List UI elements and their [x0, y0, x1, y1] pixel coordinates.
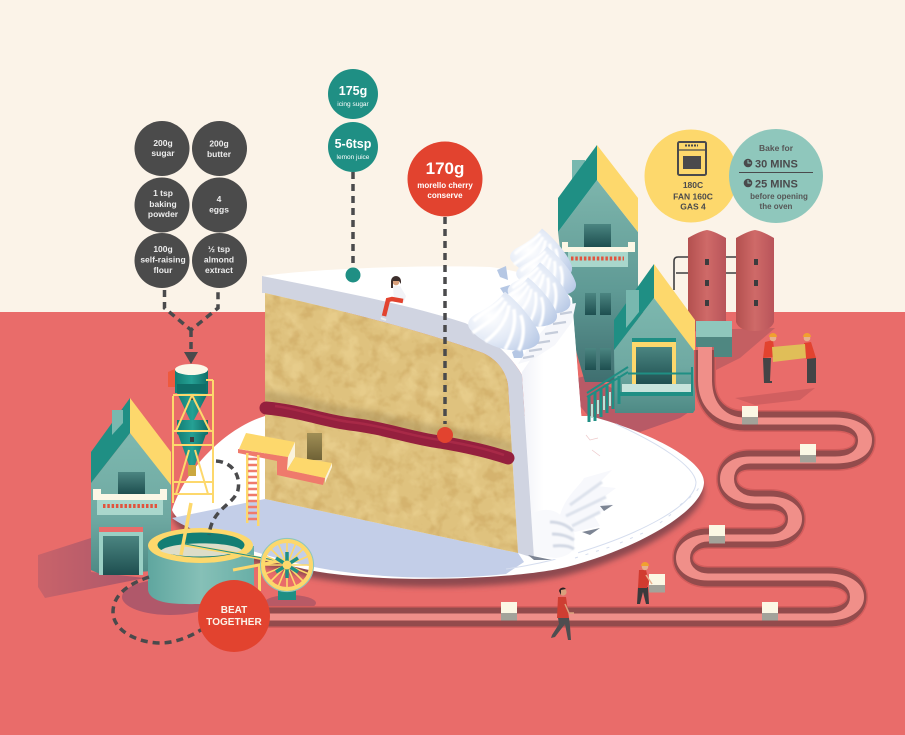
icon group: silos [674, 230, 774, 333]
left house [91, 398, 171, 575]
silo right [736, 230, 774, 331]
chimney [626, 290, 639, 328]
balcony [93, 489, 167, 515]
200g butter: 200g [209, 138, 229, 148]
cake top and side icing [262, 266, 584, 560]
175g icing sugar [328, 69, 378, 119]
beat together badge: BEAT [221, 605, 247, 616]
orange tab [168, 369, 175, 387]
arrow into tower [184, 330, 198, 364]
200g sugar: sugar [151, 148, 175, 158]
plate shaded surface [172, 499, 524, 578]
back icing blob [560, 470, 616, 535]
shadow: silos [695, 328, 775, 372]
temperature text [673, 180, 713, 212]
body [91, 433, 171, 574]
5-6tsp lemon juice: lemon juice [337, 154, 370, 161]
shadow: wheel [264, 595, 316, 611]
bake time badge [729, 129, 823, 223]
belt rim [262, 350, 865, 617]
mixer tower [168, 364, 213, 503]
silo left [688, 230, 726, 333]
box 2 [800, 444, 816, 462]
dashed flow: bowl to beat together [113, 577, 204, 643]
1 tsp baking powder: 1 tsp [153, 188, 173, 198]
attic window [584, 224, 611, 247]
roof right [130, 398, 171, 485]
100g self-raising flour: 100g [153, 244, 173, 254]
conveyor belt [262, 347, 865, 617]
workers carrying box [763, 333, 816, 383]
duct box [696, 321, 732, 357]
stair highlights [592, 392, 610, 418]
box 3 [709, 525, 725, 544]
roof left [558, 145, 597, 232]
roof left [91, 398, 130, 483]
bowl body [148, 546, 254, 604]
meringue third [508, 262, 570, 314]
door [99, 527, 143, 575]
dashed line: conserve to jam [443, 217, 447, 424]
temperature text: GAS 4 [680, 202, 706, 212]
bake time badge: 25 MINS [755, 178, 798, 190]
side icing shade [522, 300, 584, 556]
meringue second [497, 277, 557, 327]
dot: icing on cake [346, 268, 360, 282]
framed window [632, 338, 676, 385]
ingredients: dry cluster [134, 121, 247, 288]
175g icing sugar: icing sugar [337, 101, 370, 108]
box 6 [649, 574, 665, 592]
200g butter: butter [207, 149, 232, 159]
sponge texture [260, 285, 525, 560]
chimney [112, 410, 123, 435]
half tsp almond extract: extract [205, 265, 233, 275]
oven temperature badge [644, 130, 738, 222]
1 tsp baking powder [134, 178, 190, 232]
cylinder middle [177, 420, 208, 442]
small house [587, 264, 695, 422]
roof right [597, 145, 638, 232]
plate rim marks [506, 424, 700, 569]
temperature text: FAN 160C [673, 192, 713, 202]
sponge [265, 293, 518, 553]
chimney [572, 160, 585, 183]
carried box [772, 344, 806, 362]
roof right [654, 264, 695, 352]
porch rail [587, 367, 692, 397]
belt surface [262, 347, 865, 617]
5-6tsp lemon juice: 5-6tsp [335, 137, 372, 151]
walking person [551, 588, 574, 640]
4 eggs: eggs [209, 204, 229, 214]
front icing edge [262, 276, 534, 558]
100g self-raising flour: self-raising [140, 254, 186, 264]
worker left [763, 333, 777, 383]
platform underside [238, 449, 325, 485]
bowl post [258, 565, 261, 591]
5-6tsp lemon juice [328, 122, 378, 172]
half tsp almond extract [192, 233, 247, 288]
platform end [325, 463, 332, 483]
silo top [175, 364, 208, 375]
dashed flow: tower to mixing bowl [209, 461, 239, 535]
conserve badge: 170g [426, 159, 464, 178]
icon: oven [678, 142, 706, 175]
cone upper [177, 393, 208, 420]
meringue fourth [516, 246, 576, 296]
tall house [558, 145, 638, 382]
front icing blob [528, 510, 574, 560]
lower platform [287, 457, 332, 478]
connectors [190, 395, 194, 442]
batter [160, 543, 242, 557]
stairs platform on cake [238, 433, 332, 526]
porch beam [620, 392, 693, 396]
dashed line: icing to cake [351, 172, 355, 268]
box 5 [501, 602, 517, 620]
icing badges [328, 69, 378, 172]
meringue front [468, 292, 540, 350]
plate shadow [172, 424, 704, 587]
bake time badge: Bake for [759, 143, 794, 153]
sponge window [307, 433, 322, 460]
balcony [562, 242, 635, 267]
1 tsp baking powder: powder [148, 209, 179, 219]
boxes on belt [501, 406, 816, 620]
silo cylinder [175, 370, 208, 393]
half tsp almond extract: ½ tsp [208, 244, 230, 254]
icon: clock 25 [744, 179, 752, 187]
conserve badge: conserve [427, 191, 463, 200]
conserve badge [408, 142, 482, 216]
mixing bowl [148, 503, 285, 604]
dashed flow: ingredients to tower [164, 290, 218, 330]
belt dark [262, 350, 865, 617]
worker with box [637, 562, 652, 604]
worker right [803, 333, 816, 383]
meringue fifth [510, 228, 572, 280]
temperature text: 180C [683, 180, 703, 190]
box 1 [742, 406, 758, 424]
pipes [674, 257, 737, 290]
shadow: workers [735, 388, 815, 405]
ruffle icing [518, 303, 576, 364]
half tsp almond extract: almond [204, 254, 234, 264]
beat together badge: TOGETHER [206, 617, 262, 628]
meringue shadow patches [497, 266, 524, 358]
bake time badge: 30 MINS [755, 158, 798, 170]
jam [266, 408, 508, 458]
4 eggs: 4 [217, 194, 222, 204]
stair steps [589, 376, 619, 422]
4 eggs [192, 178, 247, 232]
200g sugar [134, 121, 190, 176]
plate [172, 416, 704, 579]
beat together badge [198, 580, 270, 652]
windows [585, 293, 611, 370]
wheel [260, 538, 314, 600]
200g sugar: 200g [153, 138, 173, 148]
body [558, 180, 638, 382]
silo band [177, 384, 206, 393]
bowl inside [158, 532, 244, 558]
100g self-raising flour [134, 233, 190, 288]
100g self-raising flour: flour [154, 265, 173, 275]
background: coral ground [0, 312, 905, 735]
roof left [614, 264, 654, 350]
conserve badge: morello cherry [417, 181, 473, 190]
box 4 [762, 602, 778, 620]
1 tsp baking powder: baking [149, 199, 177, 209]
jam highlight [275, 406, 504, 455]
scaffold [173, 380, 213, 503]
side cracks [586, 435, 600, 456]
body [614, 298, 695, 413]
ladder [246, 453, 260, 526]
bake time badge: the oven [760, 202, 793, 211]
bake time badge: before opening [750, 192, 808, 201]
woman sitting on cake [381, 276, 406, 320]
cake [260, 228, 616, 560]
shadow: right buildings [560, 375, 695, 432]
cone lower [178, 434, 206, 465]
upper platform [239, 433, 295, 457]
icon: clock 30 [744, 159, 752, 167]
bowl rim [148, 528, 253, 563]
shadow: mixing bowl [122, 579, 218, 615]
platform side [287, 442, 295, 470]
background: cream sky [0, 0, 905, 312]
paddle [181, 503, 191, 555]
175g icing sugar: 175g [339, 84, 367, 98]
200g butter [192, 121, 247, 176]
porch [622, 384, 692, 392]
silo windows [705, 259, 758, 306]
spout [188, 465, 196, 476]
attic window [118, 472, 145, 494]
drive arm [185, 545, 285, 563]
shadow: left house [38, 538, 145, 598]
dot: jam [437, 427, 453, 443]
